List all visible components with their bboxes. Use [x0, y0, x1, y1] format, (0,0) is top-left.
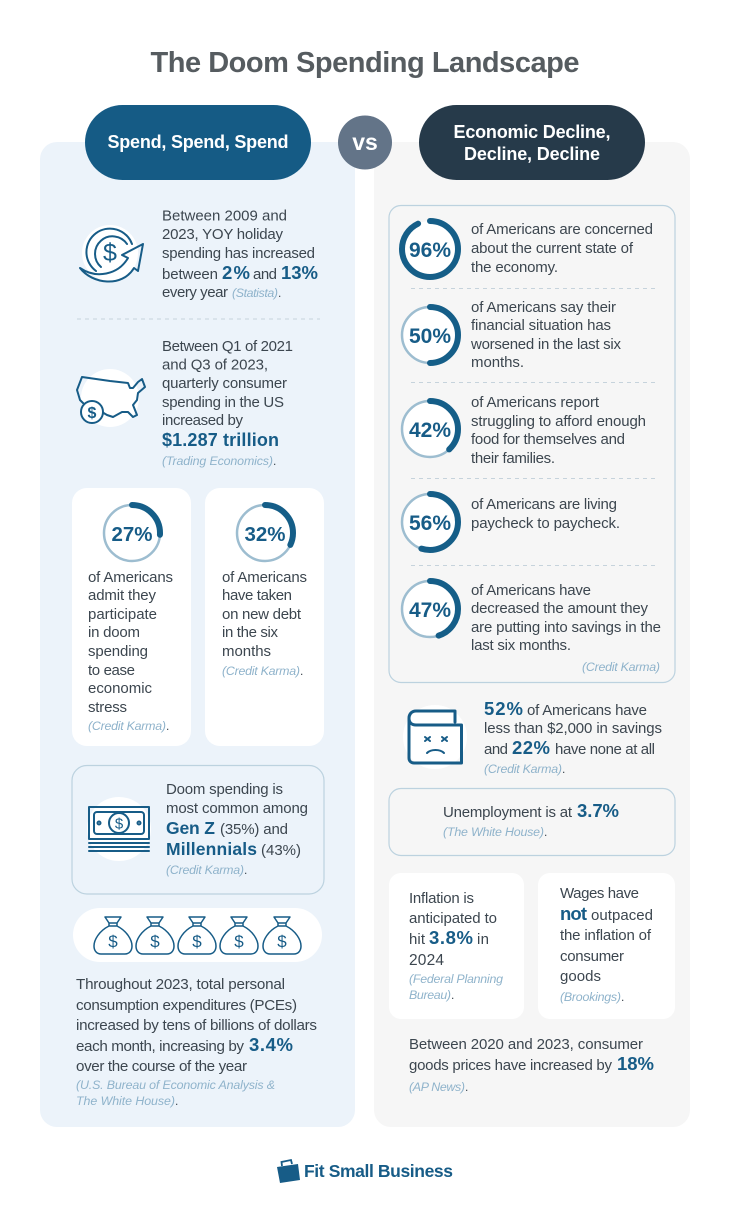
- text: PCE: [76, 976, 317, 1108]
- text: 47 percent: [471, 582, 661, 674]
- text: 50 percent: months.: [471, 354, 524, 371]
- ring: 56 percent: 56%: [409, 512, 451, 535]
- card: inflation: (Federal Planning: [409, 972, 503, 986]
- text: 27 percent: stress: [88, 699, 127, 716]
- callout: unemployment: Unemployment is at: [443, 804, 573, 821]
- callout: unemployment: 3.7%: [577, 800, 619, 821]
- ring: 50 percent: 50%: [409, 325, 451, 348]
- text: 47 percent: are putting into savings in the: [471, 619, 661, 636]
- logo: Fit Small Business: [304, 1161, 453, 1181]
- text: consumer prices: (AP News): [409, 1080, 465, 1094]
- text: savings: [484, 698, 662, 776]
- text: PCE: consumption expenditures (PCEs): [76, 997, 297, 1014]
- icon: dollar with circular arrow: [80, 225, 143, 282]
- text: 32 percent: have taken: [222, 587, 292, 604]
- text: 96 percent: [471, 221, 653, 276]
- text: consumer spending: Between Q1 of 2021: [162, 338, 293, 355]
- text: PCE: each month, increasing by: [76, 1038, 244, 1055]
- text: savings: less than $2,000 in savings: [484, 720, 662, 737]
- text: holiday spending: (Statista): [232, 286, 278, 300]
- text: consumer prices: goods prices have increased by: [409, 1057, 612, 1074]
- card: wages: .: [621, 990, 624, 1004]
- heading: decline: Economic Decline,: [454, 122, 610, 142]
- text: savings: and: [484, 741, 508, 758]
- text: 42 percent: [471, 394, 646, 467]
- card: inflation: 3.8%: [429, 927, 473, 948]
- text: 32 percent: of Americans: [222, 569, 307, 586]
- text: 32 percent: (Credit Karma): [222, 664, 300, 678]
- card: inflation: anticipated to: [409, 910, 497, 927]
- card: inflation: hit: [409, 931, 426, 948]
- text: holiday spending: Between 2009 and: [162, 208, 287, 225]
- text: holiday spending: .: [278, 286, 281, 300]
- heading: spend: Spend, Spend, Spend: [108, 132, 288, 152]
- text: 47 percent: decreased the amount they: [471, 600, 648, 617]
- card: wages: consumer: [560, 948, 624, 965]
- text: 56 percent: [471, 496, 620, 532]
- text: savings: have none at all: [555, 741, 655, 758]
- text: 32 percent: months: [222, 643, 271, 660]
- card: inflation: .: [451, 988, 454, 1002]
- card: 32 percent: [205, 488, 324, 746]
- callout: unemployment: [389, 788, 675, 856]
- icon: sad wallet: [403, 705, 467, 769]
- ring: 47 percent: 47%: [409, 599, 451, 622]
- text: 32 percent: in the six: [222, 624, 278, 641]
- text: PCE: The White House): [76, 1094, 175, 1108]
- text: 27 percent: admit they: [88, 587, 156, 604]
- ring: 32 percent: [237, 505, 293, 561]
- text: 96 percent: of Americans are concerned: [471, 221, 653, 238]
- icon: money bag 5: [263, 917, 301, 954]
- text: generations: [166, 781, 308, 877]
- text: PCE: increased by tens of billions of dollars: [76, 1017, 317, 1034]
- text: 27 percent: economic: [88, 680, 152, 697]
- text: 32 percent: on new debt: [222, 606, 302, 623]
- heading: decline: Decline, Decline: [464, 144, 600, 164]
- text: 27 percent: spending: [88, 643, 148, 660]
- text: generations: (43%): [261, 842, 301, 859]
- badge: vs: vs: [352, 129, 378, 155]
- text: PCE: over the course of the year: [76, 1058, 247, 1075]
- text: consumer spending: and Q3 of 2023,: [162, 356, 268, 373]
- card: wages: (Brookings): [560, 990, 621, 1004]
- text: 27 percent: to ease: [88, 662, 135, 679]
- text: 32 percent: [222, 569, 307, 678]
- text: 42 percent: of Americans report: [471, 394, 600, 411]
- icon row: money bags: [73, 908, 322, 962]
- text: consumer spending: increased by: [162, 412, 244, 429]
- card: inflation: 2024: [409, 952, 444, 969]
- text: 27 percent: (Credit Karma): [88, 719, 166, 733]
- text: generations: Gen Z: [166, 818, 215, 838]
- icon: money bag 2: [136, 917, 174, 954]
- text: holiday spending: 2%: [222, 262, 250, 283]
- text: 27 percent: [88, 569, 173, 733]
- text: 47 percent: of Americans have: [471, 582, 591, 599]
- text: generations: Millennials: [166, 839, 257, 859]
- text: 50 percent: [470, 299, 622, 371]
- text: 27 percent: .: [166, 719, 169, 733]
- ring: 42 percent: [402, 401, 458, 457]
- icon: money bag 4: $: [234, 932, 244, 951]
- card: inflation: [389, 873, 524, 1019]
- text: PCE: (U.S. Bureau of Economic Analysis &: [76, 1078, 275, 1092]
- icon: money bag 5: $: [277, 932, 287, 951]
- callout: generations: [72, 766, 324, 894]
- text: holiday spending: spending has increased: [162, 245, 315, 262]
- text: 96 percent: about the current state of: [471, 240, 634, 257]
- text: holiday spending: between: [162, 266, 218, 283]
- text: savings: 22%: [512, 737, 550, 758]
- text: consumer prices: [409, 1036, 654, 1094]
- ring: 47 percent: [402, 581, 458, 637]
- text: PCE: .: [175, 1094, 178, 1108]
- panel: survey statistics: [389, 206, 675, 682]
- text: generations: Doom spending is: [166, 781, 283, 798]
- text: 50 percent: of Americans say their: [471, 299, 616, 316]
- badge: vs: [338, 116, 392, 170]
- text: consumer spending: (Trading Economics): [162, 454, 273, 468]
- text: generations: (Credit Karma): [166, 863, 244, 877]
- ring: 27 percent: [104, 505, 160, 561]
- text: 56 percent: paycheck to paycheck.: [471, 515, 620, 532]
- ring: 96 percent: 96%: [409, 239, 451, 262]
- text: savings: (Credit Karma): [484, 762, 562, 776]
- card: inflation: Inflation is: [409, 890, 474, 907]
- icon: dollar with circular arrow: $: [103, 239, 117, 267]
- icon: money bag 2: $: [150, 932, 160, 951]
- text: 50 percent: financial situation has: [471, 317, 611, 334]
- text: 27 percent: participate: [88, 606, 157, 623]
- text: 27 percent: in doom: [88, 624, 140, 641]
- text: 27 percent: of Americans: [88, 569, 173, 586]
- icon: US map with coin: [77, 369, 145, 427]
- text: holiday spending: [162, 208, 318, 301]
- card: wages: not: [560, 903, 587, 924]
- icon: money bag 1: [94, 917, 132, 954]
- icon: US map with coin: $: [88, 405, 97, 422]
- ring: 96 percent: [402, 221, 458, 277]
- icon: banknotes: $: [115, 816, 124, 832]
- text: 42 percent: food for themselves and: [471, 431, 625, 448]
- ring: 27 percent: 27%: [111, 523, 153, 546]
- text: 56 percent: of Americans are living: [471, 496, 617, 513]
- text: savings: .: [562, 762, 565, 776]
- text: 42 percent: their families.: [471, 450, 555, 467]
- text: 42 percent: struggling to afford enough: [471, 413, 646, 430]
- card: wages: goods: [560, 968, 601, 985]
- text: consumer spending: .: [273, 454, 276, 468]
- text: generations: .: [244, 863, 247, 877]
- ring: 56 percent: [402, 494, 458, 550]
- text: consumer spending: quarterly consumer: [162, 375, 287, 392]
- text: holiday spending: 2023, YOY holiday: [162, 226, 284, 243]
- icon: money bag 3: $: [192, 932, 202, 951]
- text: holiday spending: and: [253, 266, 277, 283]
- text: consumer spending: [162, 338, 293, 468]
- panel: decline: [374, 105, 690, 1127]
- callout: unemployment: .: [544, 825, 547, 839]
- card: inflation: Bureau): [409, 988, 451, 1002]
- text: PCE: Throughout 2023, total personal: [76, 976, 285, 993]
- text: savings: 52%: [484, 698, 523, 719]
- callout: unemployment: (The White House): [443, 825, 544, 839]
- text: 50 percent: worsened in the last six: [470, 336, 622, 353]
- text: 32 percent: .: [300, 664, 303, 678]
- card: inflation: in: [477, 931, 489, 948]
- text: PCE: 3.4%: [249, 1034, 293, 1055]
- text: consumer prices: 18%: [617, 1053, 654, 1074]
- card: wages: Wages have: [560, 885, 639, 902]
- title: The Doom Spending Landscape: [150, 47, 580, 79]
- heading: decline: [419, 105, 645, 180]
- text: 96 percent: the economy.: [471, 259, 558, 276]
- icon: money bag 1: $: [108, 932, 118, 951]
- text: consumer prices: .: [465, 1080, 468, 1094]
- text: consumer prices: Between 2020 and 2023, consumer: [409, 1036, 643, 1053]
- ring: 42 percent: 42%: [409, 419, 451, 442]
- ring: 50 percent: [402, 307, 458, 363]
- text: savings: of Americans have: [527, 702, 647, 719]
- panel: spend: [40, 105, 355, 1127]
- text: generations: most common among: [166, 800, 308, 817]
- ring: 32 percent: 32%: [244, 523, 286, 546]
- icon: money bag 3: [178, 917, 216, 954]
- card: wages: the inflation of: [560, 927, 652, 944]
- card: wages: [538, 873, 675, 1019]
- text: holiday spending: every year: [162, 284, 228, 301]
- text: consumer spending: spending in the US: [162, 394, 284, 411]
- text: holiday spending: 13%: [281, 262, 318, 283]
- text: generations: (35%) and: [220, 821, 288, 838]
- text: consumer spending: $1.287 trillion: [162, 430, 279, 450]
- card: 27 percent: [72, 488, 191, 746]
- icon: money bag 4: [220, 917, 258, 954]
- card: wages: outpaced: [591, 907, 653, 924]
- text: 47 percent: (Credit Karma): [582, 660, 660, 674]
- heading: spend: [85, 105, 311, 180]
- icon: banknotes: [87, 797, 151, 861]
- text: 47 percent: last six months.: [471, 637, 571, 654]
